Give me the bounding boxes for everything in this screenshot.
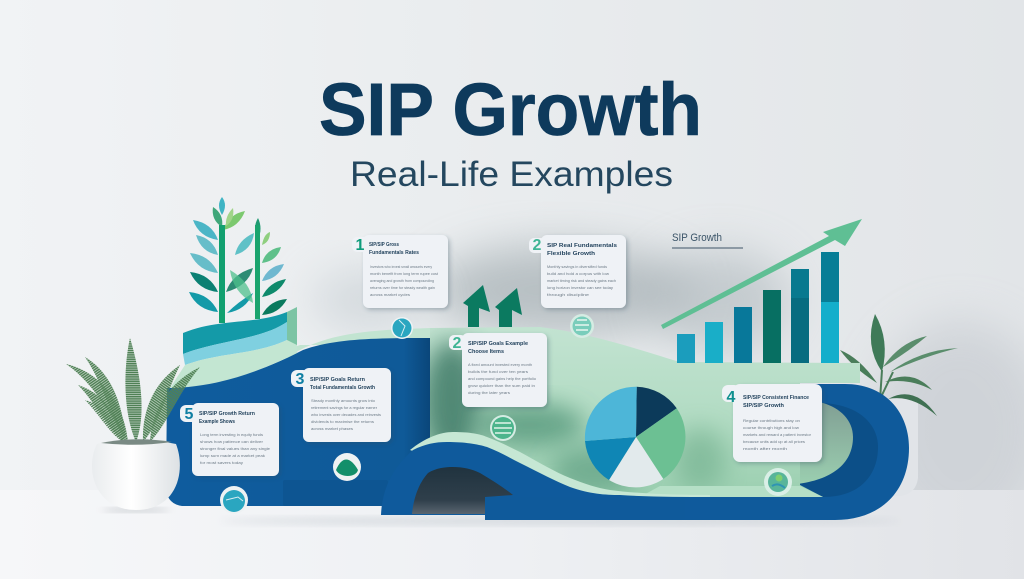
card 3 body: across market phases	[311, 427, 353, 431]
card 2 upper body: long horizon investor can see today	[547, 286, 613, 290]
card 1 body	[370, 265, 439, 297]
white pot	[92, 439, 180, 512]
card 3 body: retirement savings for a regular earner	[311, 406, 378, 410]
card 1 body: across market cycles	[370, 293, 410, 297]
pie chart	[585, 387, 685, 487]
card 2 lower heading	[468, 341, 528, 355]
card 2 upper body	[547, 265, 616, 297]
card 3	[291, 368, 391, 442]
card 4 body: course through high and low	[743, 426, 799, 430]
card 3 heading	[310, 377, 376, 391]
card 5 body: Long term investing in equity funds	[200, 433, 263, 437]
card 2 upper body: through discipline	[547, 293, 589, 297]
icon: globe 1	[391, 317, 413, 339]
blue arch	[381, 432, 710, 519]
badge 5: 5	[185, 406, 194, 423]
card 2 lower body: grow quicker than the sum paid in	[468, 384, 535, 388]
right plant	[840, 314, 958, 416]
blue stepped block	[166, 338, 430, 506]
card 2 lower body: A fixed amount invested every month	[468, 363, 532, 367]
card 2 lower body: and compound gains help the portfolio	[468, 377, 536, 381]
badge 2 upper: 2	[533, 237, 542, 254]
icon: globe 5	[220, 486, 248, 514]
card 5 body: for most savers today	[200, 461, 243, 465]
card 5 body: lump sum made at a market peak	[200, 454, 265, 458]
card 2 upper heading: SIP Real Fundamentals	[547, 243, 617, 249]
growth arrow	[661, 219, 862, 329]
badge 1: 1	[356, 237, 365, 254]
card 1 heading: SIP/SIP Gross	[369, 242, 399, 248]
card 5	[180, 403, 279, 476]
card 3 body: who invests over decades and reinvests	[311, 413, 381, 417]
card 4 body: Regular contributions stay on	[743, 419, 800, 423]
badge 2 lower: 2	[453, 335, 462, 352]
card 5 heading: SIP/SIP Growth Return	[199, 411, 256, 417]
fern	[66, 338, 200, 444]
card 2 lower	[449, 333, 547, 407]
card 2 lower body: during the later years	[468, 391, 510, 395]
card 3 heading: SIP/SIP Goals Return	[310, 377, 366, 383]
card 1 body: averaging and growth from compounding	[370, 279, 434, 283]
card 2 lower heading: Choose Items	[468, 349, 504, 355]
chart label	[672, 232, 743, 248]
title: SIP Growth	[319, 68, 702, 151]
card 2 upper body: market timing risk and steady gains each	[547, 279, 616, 283]
chart label: SIP Growth	[672, 232, 722, 244]
green platform	[422, 327, 860, 497]
tall leaf plant	[189, 197, 287, 323]
icon: globe 4	[764, 468, 792, 496]
card 4 heading: SIP/SIP Consistent Finance	[743, 395, 809, 401]
card 2 lower body: builds the fund over ten years	[468, 370, 528, 374]
card 1	[352, 235, 448, 308]
card 2 upper heading: Flexible Growth	[547, 251, 596, 257]
card 3 body: Steady monthly amounts grow into	[311, 399, 375, 403]
card 5 heading: Example Shows	[199, 419, 235, 425]
card 2 upper body: Monthly savings in diversified funds	[547, 265, 607, 269]
card 1 heading: Fundamentals Rates	[369, 250, 419, 256]
card 5 body: shows how patience can deliver	[200, 440, 264, 444]
card 5 body: stronger final values than any single	[200, 447, 270, 451]
card 2 lower heading: SIP/SIP Goals Example	[468, 341, 528, 347]
card 4 heading: SIP/SIP Growth	[743, 403, 785, 409]
subtitle: Real-Life Examples	[350, 155, 673, 194]
badge 4: 4	[727, 389, 736, 406]
card 4 body: because units add up at all prices	[743, 440, 805, 444]
card 4 heading	[743, 395, 809, 409]
card 5 body	[200, 433, 270, 465]
card 3 heading: Total Fundamentals Growth	[310, 385, 376, 391]
right planter	[885, 398, 918, 496]
card 4 body: month after month	[743, 447, 787, 451]
card 1 body: returns over time for steady wealth gain	[370, 286, 435, 290]
green growth arrows	[463, 285, 522, 327]
card 2 lower body	[468, 363, 536, 395]
icon: globe 3	[333, 453, 361, 481]
card 3 body: dividends to maximise the returns	[311, 420, 374, 424]
icon: globe 2 lower	[490, 415, 516, 441]
card 2 upper heading	[547, 243, 617, 257]
bar chart	[677, 252, 839, 363]
teal layered planter	[170, 307, 297, 388]
card 4	[722, 384, 822, 462]
card 2 upper body: build and hold a corpus with low	[547, 272, 609, 276]
card 5 heading	[199, 411, 256, 425]
blue U-shaped ribbon	[485, 384, 909, 520]
background wall and floor	[274, 0, 1024, 579]
card 1 body: month benefit from long term rupee cost	[370, 272, 439, 276]
icon: globe 2 upper	[570, 314, 594, 338]
card 2 upper	[529, 235, 626, 308]
card 4 body: markets and reward a patient investor	[743, 433, 812, 437]
light green wave left	[160, 328, 430, 392]
card 1 heading	[369, 242, 419, 256]
card 3 body	[311, 399, 381, 431]
card 4 body	[743, 419, 812, 451]
badge 3: 3	[296, 371, 305, 388]
card 1 body: Investors who invest small amounts every	[370, 265, 432, 269]
